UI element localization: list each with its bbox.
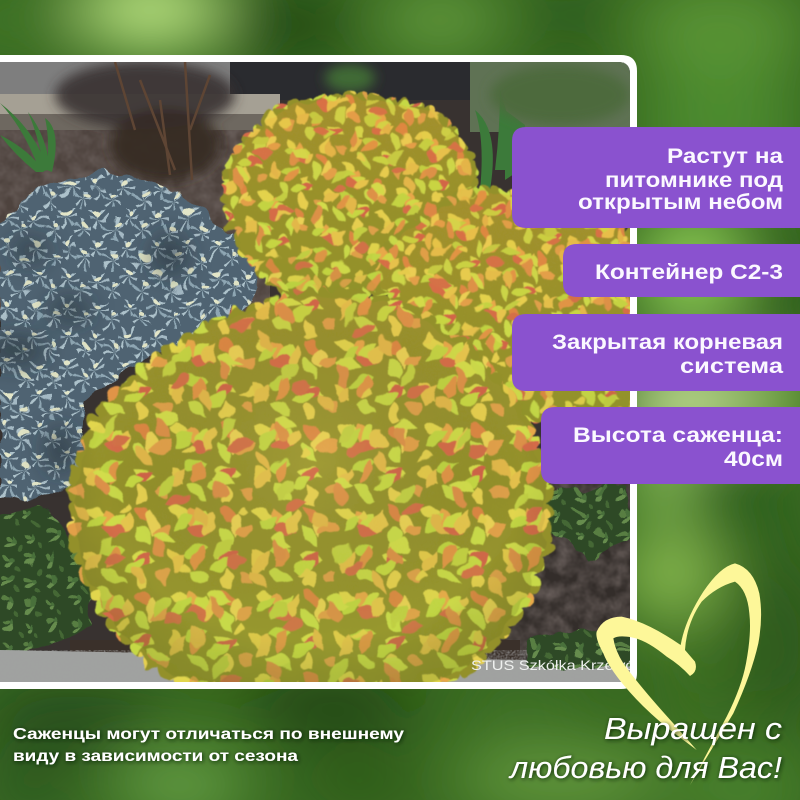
disclaimer note [13, 726, 404, 765]
panel: seedling height [541, 407, 800, 484]
panel: container: Контейнер С2-3 [595, 260, 783, 284]
disclaimer note: виду в зависимости от сезона [13, 748, 298, 765]
panel: root system [512, 314, 800, 391]
blue spruce [0, 174, 262, 500]
upper right foliage [325, 64, 630, 125]
panel: container [563, 244, 800, 297]
slogan: Выращен с [604, 711, 783, 746]
white photo frame [0, 55, 637, 689]
watermark: STUS Szkółka Krzewów [471, 657, 647, 673]
panel: seedling height: Высота саженца: [573, 423, 783, 447]
panel: seedling height: 40см [724, 447, 783, 471]
icon: yellow heart [596, 563, 761, 785]
panel: growing conditions: Растут на [667, 144, 784, 168]
slogan: любовью для Вас! [508, 750, 782, 785]
right golden shrub [372, 194, 640, 420]
panel: root system: система [680, 354, 784, 378]
panel: growing conditions [512, 127, 800, 228]
herb bush lower left [0, 505, 92, 655]
main golden shrub [76, 297, 546, 690]
right side groundcover [525, 485, 630, 668]
panel: root system: Закрытая корневая [552, 330, 783, 354]
soil and sidewalk lower right [0, 480, 630, 682]
disclaimer note: Саженцы могут отличаться по внешнему [13, 726, 404, 743]
spruce shadows [0, 235, 188, 474]
background green leaves [0, 103, 525, 189]
panel: growing conditions: открытым небом [578, 190, 783, 214]
top golden shrub [226, 99, 472, 296]
photo: shrubs in a garden bed [0, 61, 647, 690]
panel: growing conditions: питомнике под [605, 168, 783, 192]
slogan [508, 711, 783, 785]
background fence and wall [0, 62, 630, 682]
dark shrub [55, 61, 235, 181]
